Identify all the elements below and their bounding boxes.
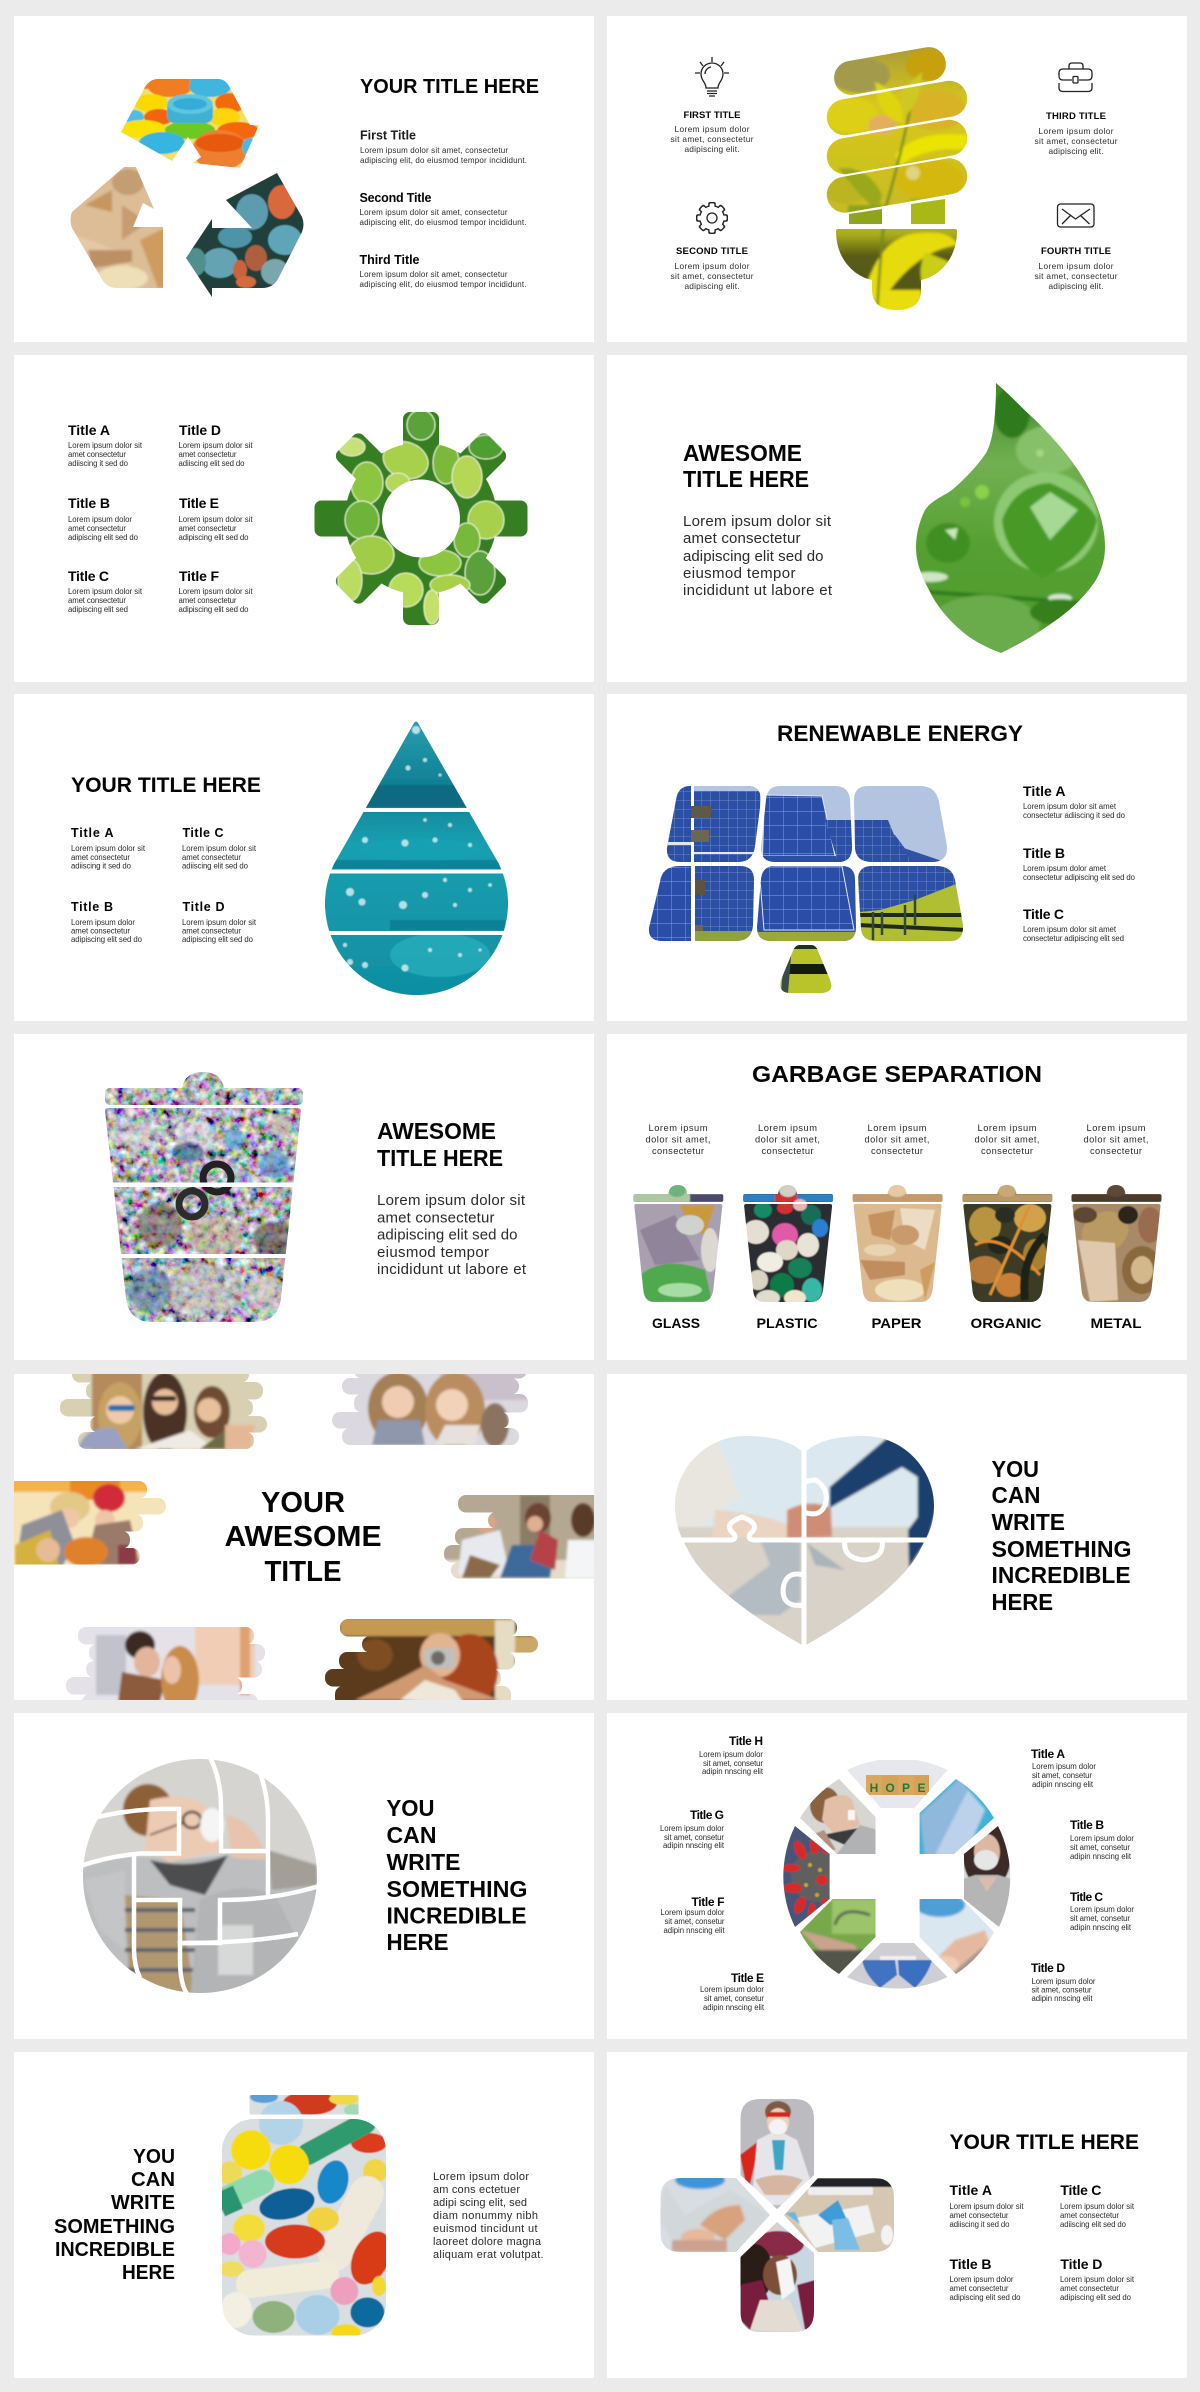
captions row: Lorem ipsum [1086,1123,1146,1133]
item: second title: adipiscing elit. [684,281,740,291]
heading: YOU [992,1456,1039,1482]
segment: washing hands [800,1899,876,1974]
item: title C [1023,906,1124,943]
item: title A: Lorem ipsum dolor sit amet [1023,802,1117,811]
item: title C: Lorem ipsum dolor [1070,1905,1134,1914]
heading: INCREDIBLE [992,1562,1130,1588]
photo: autumn pumpkin [14,1481,166,1564]
item: first title: adipiscing elit, do eiusmod tempor incididunt. [360,156,527,165]
segment: hope blocks: H [870,1781,878,1795]
item: title F: Lorem ipsum dolor [660,1908,725,1917]
leaf image [910,380,1110,660]
item: title A: Lorem ipsum dolor sit [950,2202,1024,2211]
item: third title: THIRD TITLE [1046,111,1106,122]
item: title C: amet consectetur [1060,2211,1119,2220]
item: title G: sit amet, consetur [664,1833,724,1842]
item: title C: Title C [1023,906,1064,922]
item: first title: Lorem ipsum dolor sit amet, consectetur [360,146,508,155]
item: title B: amet consectetur [950,2284,1009,2293]
panel: puzzle heart [607,1374,1187,1700]
item: title B: Title B [71,900,113,914]
item: title B [1023,845,1136,882]
item: title B: sit amet, consetur [1070,1843,1130,1852]
item: title E: adipin nnscing elit [703,2003,765,2012]
jar of pills image [218,2090,399,2340]
photo: three friends [60,1374,267,1449]
panel: medical cross [607,2052,1187,2378]
heading: YOUR TITLE HERE [71,774,261,797]
item: third title [1034,111,1118,156]
item: title H [699,1734,764,1776]
item: first title: FIRST TITLE [684,110,740,121]
item: title A: amet consectetur [68,450,126,459]
recycling symbol image [65,75,309,300]
captions row [646,1123,1148,1156]
item: title A [71,826,146,870]
item: title D: adipiscing elit sed do [182,935,254,944]
captions row: dolor sit amet, [974,1134,1040,1144]
panel: recycling [14,16,594,342]
item: title H: Lorem ipsum dolor [699,1750,763,1759]
petal: woman sneezing [737,2220,818,2335]
item: third title: adipiscing elit, do eiusmod tempor incididunt. [360,280,526,289]
item: title D: Lorem ipsum dolor [1032,1977,1096,1986]
panel: garbage separation [607,1034,1187,1360]
item: title C [1060,2182,1135,2229]
title [225,1492,380,1581]
text block [433,2171,544,2261]
item: title B: adipiscing elit sed do [950,2293,1021,2302]
label: metal: METAL [1090,1315,1142,1331]
text block: eiusmod tempor [377,1244,489,1261]
item: title B: Lorem ipsum dolor [950,2275,1014,2284]
item: title C: Lorem ipsum dolor sit amet [1023,925,1117,934]
heading: TITLE HERE [377,1145,503,1171]
item: title D: sit amet, consetur [1032,1986,1092,1994]
text block: incididunt ut labore et [683,582,833,599]
petal: doctor [738,2096,818,2212]
item: first title: adipiscing elit. [684,144,740,154]
spiral bulb image [826,47,968,310]
heading: WRITE [386,1849,460,1875]
item: title D [178,422,253,468]
label: glass: GLASS [652,1315,700,1331]
item: title E: Lorem ipsum dolor [700,1985,764,1994]
item: title B: Title B [1070,1818,1104,1832]
item: title D: Title D [179,422,221,438]
item: fourth title: adipiscing elit. [1048,281,1104,291]
captions row: consectetur [652,1146,704,1156]
photo: couple [66,1627,265,1700]
item: title D: Lorem ipsum dolor sit [1060,2275,1135,2284]
icon: gear [696,202,728,234]
item: title F: Title F [692,1895,724,1909]
item: fourth title: Lorem ipsum dolor [1038,261,1114,271]
text block: amet consectetur [377,1210,494,1226]
item: title C: adipiscing elit sed [68,605,128,614]
item: title A: adiiscing it sed do [68,459,129,468]
item: title A [950,2182,1024,2229]
icon: light bulb [695,57,729,96]
captions row: Lorem ipsum [978,1123,1037,1133]
item: title G: adipin nnscing elit [663,1841,725,1850]
item: second title: SECOND TITLE [676,246,748,257]
item: title D: adiiscing elit sed do [178,459,245,468]
segment: virus [783,1826,830,1927]
item: title B: Title B [68,495,110,511]
item: title C: sit amet, consetur [1070,1914,1130,1923]
text block: incididunt ut labore et [377,1261,527,1278]
item: title F: sit amet, consetur [664,1917,725,1926]
text block: adipi scing elit, sed [433,2197,527,2209]
item: title C: Title C [1060,2182,1101,2198]
text block [377,1192,527,1278]
item: title D [182,900,257,944]
panel: renewable energy [607,694,1187,1021]
item: title A: Title A [1031,1747,1065,1761]
heading [54,2146,175,2284]
panel: health ring [607,1713,1187,2039]
text block: eiusmod tempor [683,565,796,582]
segment: hope blocks: O [885,1781,895,1795]
segment: woman with mask [964,1826,1010,1927]
item: title C [1070,1890,1134,1932]
item: title A: adipin nnscing elit [1032,1780,1094,1789]
item: second title [670,246,754,291]
text block: adipiscing elit sed do [683,548,824,565]
label: organic: ORGANIC [970,1315,1042,1331]
text block: am cons ectetuer [433,2184,520,2196]
item: second title [360,191,526,227]
photo: two girls [332,1374,528,1445]
item: third title [360,253,526,289]
captions row: consectetur [1090,1146,1142,1156]
item: title D: Lorem ipsum dolor sit [178,441,253,450]
heading [386,1795,528,1955]
text block: amet consectetur [683,530,800,547]
item: title A: sit amet, consetur [1032,1771,1092,1780]
heart puzzle image [670,1430,940,1652]
item: fourth title: FOURTH TITLE [1041,246,1111,257]
item: title A [1023,783,1126,820]
item: title C: adiiscing elit sed do [182,862,249,870]
item: title D: amet consectetur [178,450,237,459]
item: first title [670,110,754,154]
item: title G [660,1808,725,1850]
photo: woman with camera [325,1619,538,1700]
item: second title: Second Title [360,191,432,205]
item: title A: Lorem ipsum dolor sit [68,441,143,450]
item: third title: sit amet, consectetur [1034,136,1118,146]
item: first title: Lorem ipsum dolor [674,124,750,134]
item: title D: Title D [1060,2256,1102,2272]
label: plastic: PLASTIC [756,1315,818,1331]
item: title E: Title E [179,495,219,511]
water drop image [320,718,515,998]
item: title C: Lorem ipsum dolor sit [1060,2202,1135,2211]
heading: WRITE [992,1509,1065,1535]
heading: HERE [386,1929,448,1955]
item: title B: adipiscing elit sed do [71,935,143,944]
item: title C: Lorem ipsum dolor sit [182,844,257,853]
captions row: dolor sit amet, [1084,1134,1148,1144]
item: title F: adipin nnscing elit [664,1926,725,1935]
segment: hope blocks: P [902,1781,910,1795]
item: third title: Lorem ipsum dolor [1038,126,1114,136]
heading: CAN [992,1482,1040,1508]
item: title D: Title D [182,900,224,914]
captions row: consectetur [981,1146,1033,1156]
petal: sanitizer hands [658,2171,773,2255]
item: title E [700,1971,765,2012]
heading [377,1118,503,1171]
item: title H: sit amet, consetur [703,1759,763,1768]
icon: briefcase [1059,63,1092,92]
item: title C: adipin nnscing elit [1070,1923,1132,1932]
heading: HERE [122,2262,175,2284]
item: title B: Title B [950,2256,992,2272]
item: title B [71,900,143,944]
item: title D: Lorem ipsum dolor sit [182,918,257,927]
heading: SOMETHING [386,1876,528,1902]
segment: hope blocks: E [917,1781,926,1795]
item: title A [68,422,143,468]
item: title E: Title E [731,1971,764,1985]
item: title D [1031,1961,1096,2003]
item: title F: adipiscing elit sed do [178,605,249,614]
captions row: dolor sit amet, [646,1134,710,1144]
item: title B: amet consectetur [71,926,130,936]
item: title D: adipin nnscing elit [1032,1994,1093,2003]
woven circle image [80,1755,320,1997]
item: title E: sit amet, consetur [704,1994,764,2003]
item: title A: Lorem ipsum dolor sit [71,844,146,853]
item: title B: amet consectetur [68,524,126,533]
item: title B: consectetur adipiscing elit sed do [1023,873,1136,882]
item: title A: amet consectetur [950,2211,1009,2220]
heading: HERE [992,1589,1053,1615]
item: title B: adipiscing elit sed do [68,533,139,542]
item: title A: Title A [1023,783,1066,799]
trash bin image [100,1070,310,1325]
segment: blue masks [847,1943,948,1988]
item: title C: Lorem ipsum dolor sit [68,587,143,596]
captions row: Lorem ipsum [648,1123,708,1133]
item: title C: amet consectetur [68,596,126,605]
item: title B: Title B [1023,845,1065,861]
item: title C: Title C [1070,1890,1103,1904]
item: title B: Lorem ipsum dolor [68,515,132,524]
text block: Lorem ipsum dolor sit [683,513,832,530]
text block [683,513,833,599]
heading: AWESOME [377,1118,496,1144]
item: title A: Title A [950,2182,992,2198]
item: title H: Title H [729,1734,763,1748]
panel: gear with six items [14,355,594,682]
item: third title: Third Title [360,253,420,267]
item: title E: adipiscing elit sed do [178,533,249,542]
item: title E: Lorem ipsum dolor sit [178,515,253,524]
captions row: consectetur [871,1146,923,1156]
heading: SOMETHING [54,2216,175,2238]
item: title F: amet consectetur [178,596,237,605]
text block: Lorem ipsum dolor sit [377,1192,526,1209]
item: title G: Title G [690,1808,724,1822]
panel: energy bulb [607,16,1187,342]
segment: sanitizer hands [920,1899,994,1974]
petal: wiping keyboard [780,2175,898,2255]
heading: GARBAGE SEPARATION [752,1061,1042,1087]
item: third title: adipiscing elit. [1048,146,1104,156]
captions row: Lorem ipsum [758,1123,817,1133]
item: title E: amet consectetur [178,524,237,533]
item: title D: adipiscing elit sed do [1060,2293,1132,2302]
panel: people brush photos [10,1370,600,1714]
heading: SOMETHING [992,1536,1132,1562]
heading [683,440,809,492]
heading: RENEWABLE ENERGY [777,721,1023,746]
item: title C: Title C [68,568,109,584]
item: second title: Lorem ipsum dolor [674,261,750,271]
panel: woven circle [14,1713,594,2039]
item: title H: adipin nnscing elit [702,1767,764,1776]
item: title F [660,1895,725,1935]
bin: metal [1072,1185,1162,1302]
captions row: dolor sit amet, [755,1134,820,1144]
heading: YOUR TITLE HERE [360,75,539,98]
item: title D [1060,2256,1135,2302]
item: second title: sit amet, consectetur [670,271,754,281]
item: title C: Title C [182,826,224,840]
item: title A: consectetur adiiscing it sed do [1023,811,1126,820]
item: title A: Title A [71,826,114,840]
item: title E [178,495,253,542]
heading [992,1456,1132,1615]
text block: aliquam erat volutpat. [433,2249,544,2261]
title: TITLE [264,1556,342,1588]
item: title C: amet consectetur [182,853,241,862]
item: fourth title: sit amet, consectetur [1034,271,1118,281]
item: title A: Lorem ipsum dolor [1032,1762,1096,1771]
text block: Lorem ipsum dolor [433,2171,529,2183]
item: first title [360,128,527,165]
item: title F: Lorem ipsum dolor sit [178,587,253,596]
item: title C: consectetur adipiscing elit sed [1023,934,1124,943]
text block: adipiscing elit sed do [377,1226,518,1244]
item: first title: sit amet, consectetur [670,134,754,144]
item: title C [182,826,257,870]
bin: paper [850,1183,946,1305]
item: second title: Lorem ipsum dolor sit amet, consectetur [360,208,508,217]
item: fourth title [1034,246,1118,291]
item: title D: amet consectetur [182,926,241,936]
item: third title: Lorem ipsum dolor sit amet, consectetur [360,270,508,279]
item: title B: Lorem ipsum dolor [1070,1834,1134,1843]
item: title B [950,2256,1021,2302]
item: title C [68,568,143,614]
captions row: dolor sit amet, [864,1134,930,1144]
text block: laoreet dolore magna [433,2236,542,2248]
heading: YOUR TITLE HERE [950,2131,1139,2154]
text block: euismod tincidunt ut [433,2223,538,2235]
item: title A: Title A [68,422,110,438]
segment: sanitizer bottle [920,1779,994,1854]
heading: TITLE HERE [683,466,809,492]
item: title C: adiiscing elit sed do [1060,2220,1127,2229]
segment: hope blocks [847,1760,948,1808]
heading: YOU [133,2146,175,2168]
icon: envelope [1058,204,1094,227]
photo: beach friends [444,1495,594,1578]
bin: glass [630,1183,726,1305]
item: title F [178,568,253,614]
item: title A: amet consectetur [71,853,130,862]
panel: trash bin [14,1034,594,1360]
gear image [310,408,532,630]
item: title D: Title D [1031,1961,1065,1975]
heading: CAN [386,1822,436,1848]
heading: INCREDIBLE [55,2239,175,2261]
item: title B: Lorem ipsum dolor amet [1023,864,1107,873]
item: title B: Lorem ipsum dolor [71,918,135,927]
heading: AWESOME [683,440,802,466]
item: title D: amet consectetur [1060,2284,1119,2293]
panel: pill jar [14,2052,594,2378]
item: title B: adipin nnscing elit [1070,1852,1132,1861]
item: title A [1031,1747,1096,1789]
bin: plastic [743,1185,834,1302]
item: title A: adiiscing it sed do [71,862,132,870]
captions row: consectetur [762,1146,814,1156]
item: title B [1070,1818,1134,1861]
item: first title: First Title [360,128,416,142]
heading: INCREDIBLE [386,1902,526,1928]
heading: WRITE [111,2192,175,2214]
bin: organic [960,1183,1056,1305]
heading: YOU [386,1795,434,1821]
segment: man with tissue [795,1775,880,1860]
title: AWESOME [224,1521,382,1553]
item: second title: adipiscing elit, do eiusmod tempor incididunt. [360,218,526,227]
heading: CAN [131,2169,175,2191]
item: title F: Title F [179,568,219,584]
panel: water drop [14,694,594,1021]
text block: diam nonummy nibh [433,2210,538,2222]
panel: leaf drop [607,355,1187,682]
captions row: Lorem ipsum [868,1123,927,1133]
title: YOUR [261,1487,345,1519]
item: title A: adiiscing it sed do [950,2220,1010,2229]
solar panel image [645,782,970,997]
label: paper: PAPER [872,1315,922,1331]
item: title B [68,495,139,542]
item: title G: Lorem ipsum dolor [660,1824,724,1833]
